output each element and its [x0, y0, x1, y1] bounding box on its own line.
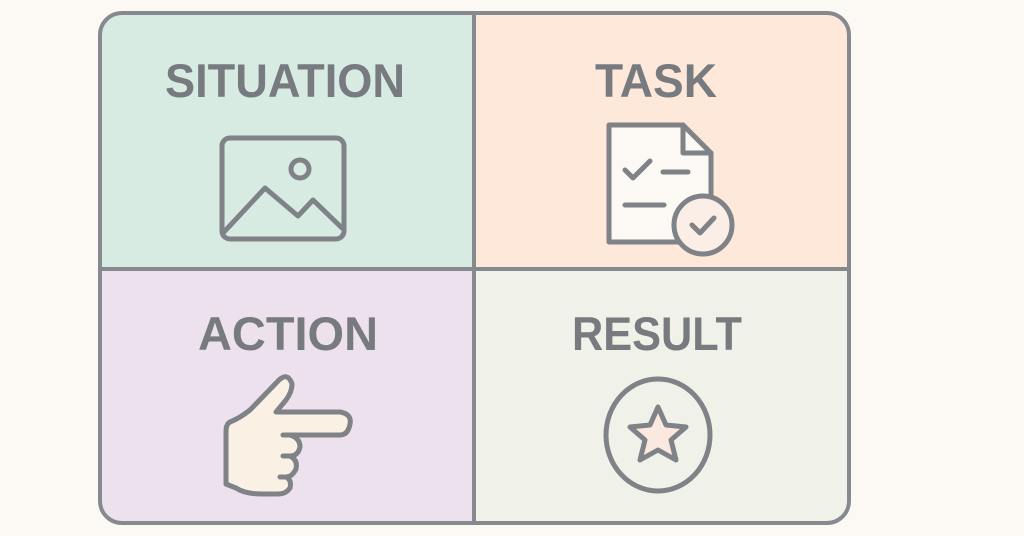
heading: action: ACTION	[198, 307, 378, 360]
heading: situation: SITUATION	[165, 54, 405, 107]
panel: result	[474, 269, 849, 523]
icon: checklist document	[609, 125, 732, 254]
panel: action	[100, 269, 474, 523]
panel: task	[474, 13, 849, 269]
icon: star badge	[606, 379, 710, 491]
heading: task: TASK	[595, 54, 717, 107]
grid frame	[100, 13, 849, 523]
heading: result: RESULT	[572, 307, 742, 360]
icon: image	[222, 138, 344, 239]
icon: pointing hand	[226, 377, 350, 494]
panel: situation	[100, 13, 474, 269]
